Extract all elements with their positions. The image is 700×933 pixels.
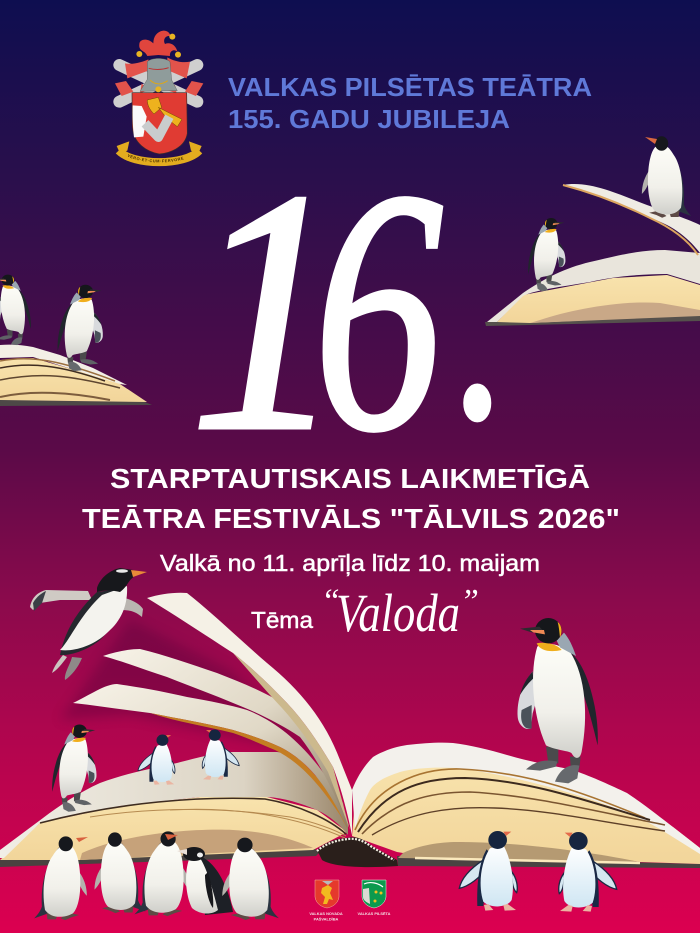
large numeral 16.	[190, 120, 505, 502]
festival title	[82, 463, 620, 534]
icon: bottom penguin group	[34, 831, 279, 920]
large numeral 16.: .	[462, 207, 505, 472]
shield	[132, 93, 187, 154]
gold lion	[321, 885, 333, 904]
red mantling	[115, 57, 203, 96]
caption: VALKAS NOVADA	[309, 911, 343, 916]
spine	[317, 837, 398, 867]
theme label: Tēma	[251, 607, 313, 633]
left page block	[0, 752, 348, 867]
fanned page 1	[147, 593, 352, 835]
page shadow	[60, 620, 330, 760]
organiser heading: 155. GADU JUBILEJA	[228, 104, 510, 134]
theme word Valoda: ”	[460, 583, 479, 620]
festival dates: Valkā no 11. aprīļa līdz 10. maijam	[160, 550, 540, 576]
left book with penguins	[0, 275, 152, 406]
icon: flying penguin	[30, 568, 147, 680]
large numeral 16.: 1	[190, 120, 344, 502]
caption: PAŠVALDĪBA	[314, 916, 339, 922]
icon: small blue penguin left	[138, 735, 175, 785]
fanned page 2	[103, 649, 348, 823]
penguin 3	[134, 831, 191, 916]
book body	[485, 184, 700, 326]
large numeral 16.: 6	[314, 120, 443, 502]
penguin 2	[95, 832, 146, 913]
golden hammer	[147, 97, 182, 127]
sleeve cut	[133, 105, 147, 137]
crossed bones behind the mantling	[119, 65, 197, 102]
icon: king penguin left	[0, 275, 31, 345]
municipality logo: Valka town	[358, 880, 391, 916]
red shield	[315, 880, 339, 908]
theme word Valoda: “	[321, 583, 340, 620]
penguin 1	[34, 836, 88, 920]
municipality logo: Valka county	[309, 880, 343, 922]
icon: king penguin right	[58, 285, 103, 371]
festival title: STARPTAUTISKAIS LAIKMETĪGĀ	[110, 463, 590, 494]
helmet	[140, 58, 177, 91]
gold motto ribbon: VERO·ET·CUM·FERVORE	[128, 154, 184, 162]
penguin 5	[222, 838, 279, 920]
icon: bottom penguin facing left	[559, 832, 617, 912]
armoured arm	[145, 117, 169, 137]
festival title: TEĀTRA FESTIVĀLS "TĀLVILS 2026"	[82, 503, 620, 534]
green shield	[362, 880, 386, 908]
fanned page 3	[73, 684, 348, 830]
right page block	[352, 743, 700, 868]
main open book	[0, 593, 700, 868]
icon: bottom penguin facing right	[459, 831, 517, 911]
icon: king penguin standing on right page	[518, 618, 598, 783]
icon: king penguin	[528, 218, 565, 291]
jester hat	[136, 31, 181, 58]
shield details	[363, 888, 370, 904]
icon: king penguin standing on left page	[52, 725, 96, 812]
organiser heading	[228, 72, 592, 134]
coat of arms	[113, 30, 204, 166]
icon: stout penguin on page	[642, 136, 691, 218]
theme word Valoda: Valoda	[336, 583, 460, 643]
penguin 4 gentoo	[177, 847, 233, 915]
icon: small blue penguin right	[202, 730, 239, 780]
organiser heading: VALKAS PILSĒTAS TEĀTRA	[228, 72, 592, 102]
caption	[309, 911, 343, 922]
book body	[0, 345, 152, 406]
top right book with penguins	[485, 136, 700, 326]
caption: VALKAS PILSĒTA	[358, 911, 391, 916]
